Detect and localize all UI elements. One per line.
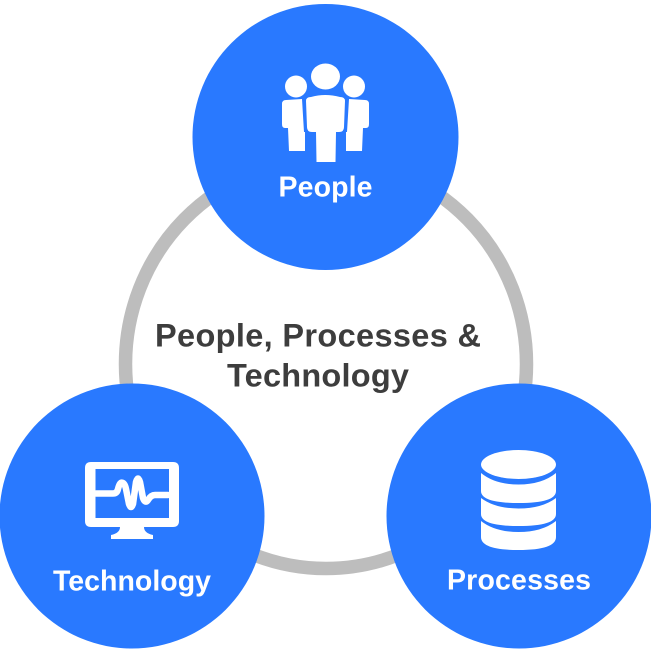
icon: database stack xyxy=(481,450,556,550)
panel: technology xyxy=(0,384,264,648)
panel: people xyxy=(192,4,458,270)
panel: processes xyxy=(386,384,651,648)
central title: People, Processes & xyxy=(155,318,481,354)
connecting ring xyxy=(126,160,526,568)
central title xyxy=(155,318,481,394)
central title: Technology xyxy=(227,358,409,394)
label: technology: Technology xyxy=(53,566,211,598)
label: people: People xyxy=(278,172,372,204)
icon: monitor with pulse xyxy=(85,462,179,539)
icon: people group xyxy=(282,64,369,162)
label: processes: Processes xyxy=(447,564,591,596)
